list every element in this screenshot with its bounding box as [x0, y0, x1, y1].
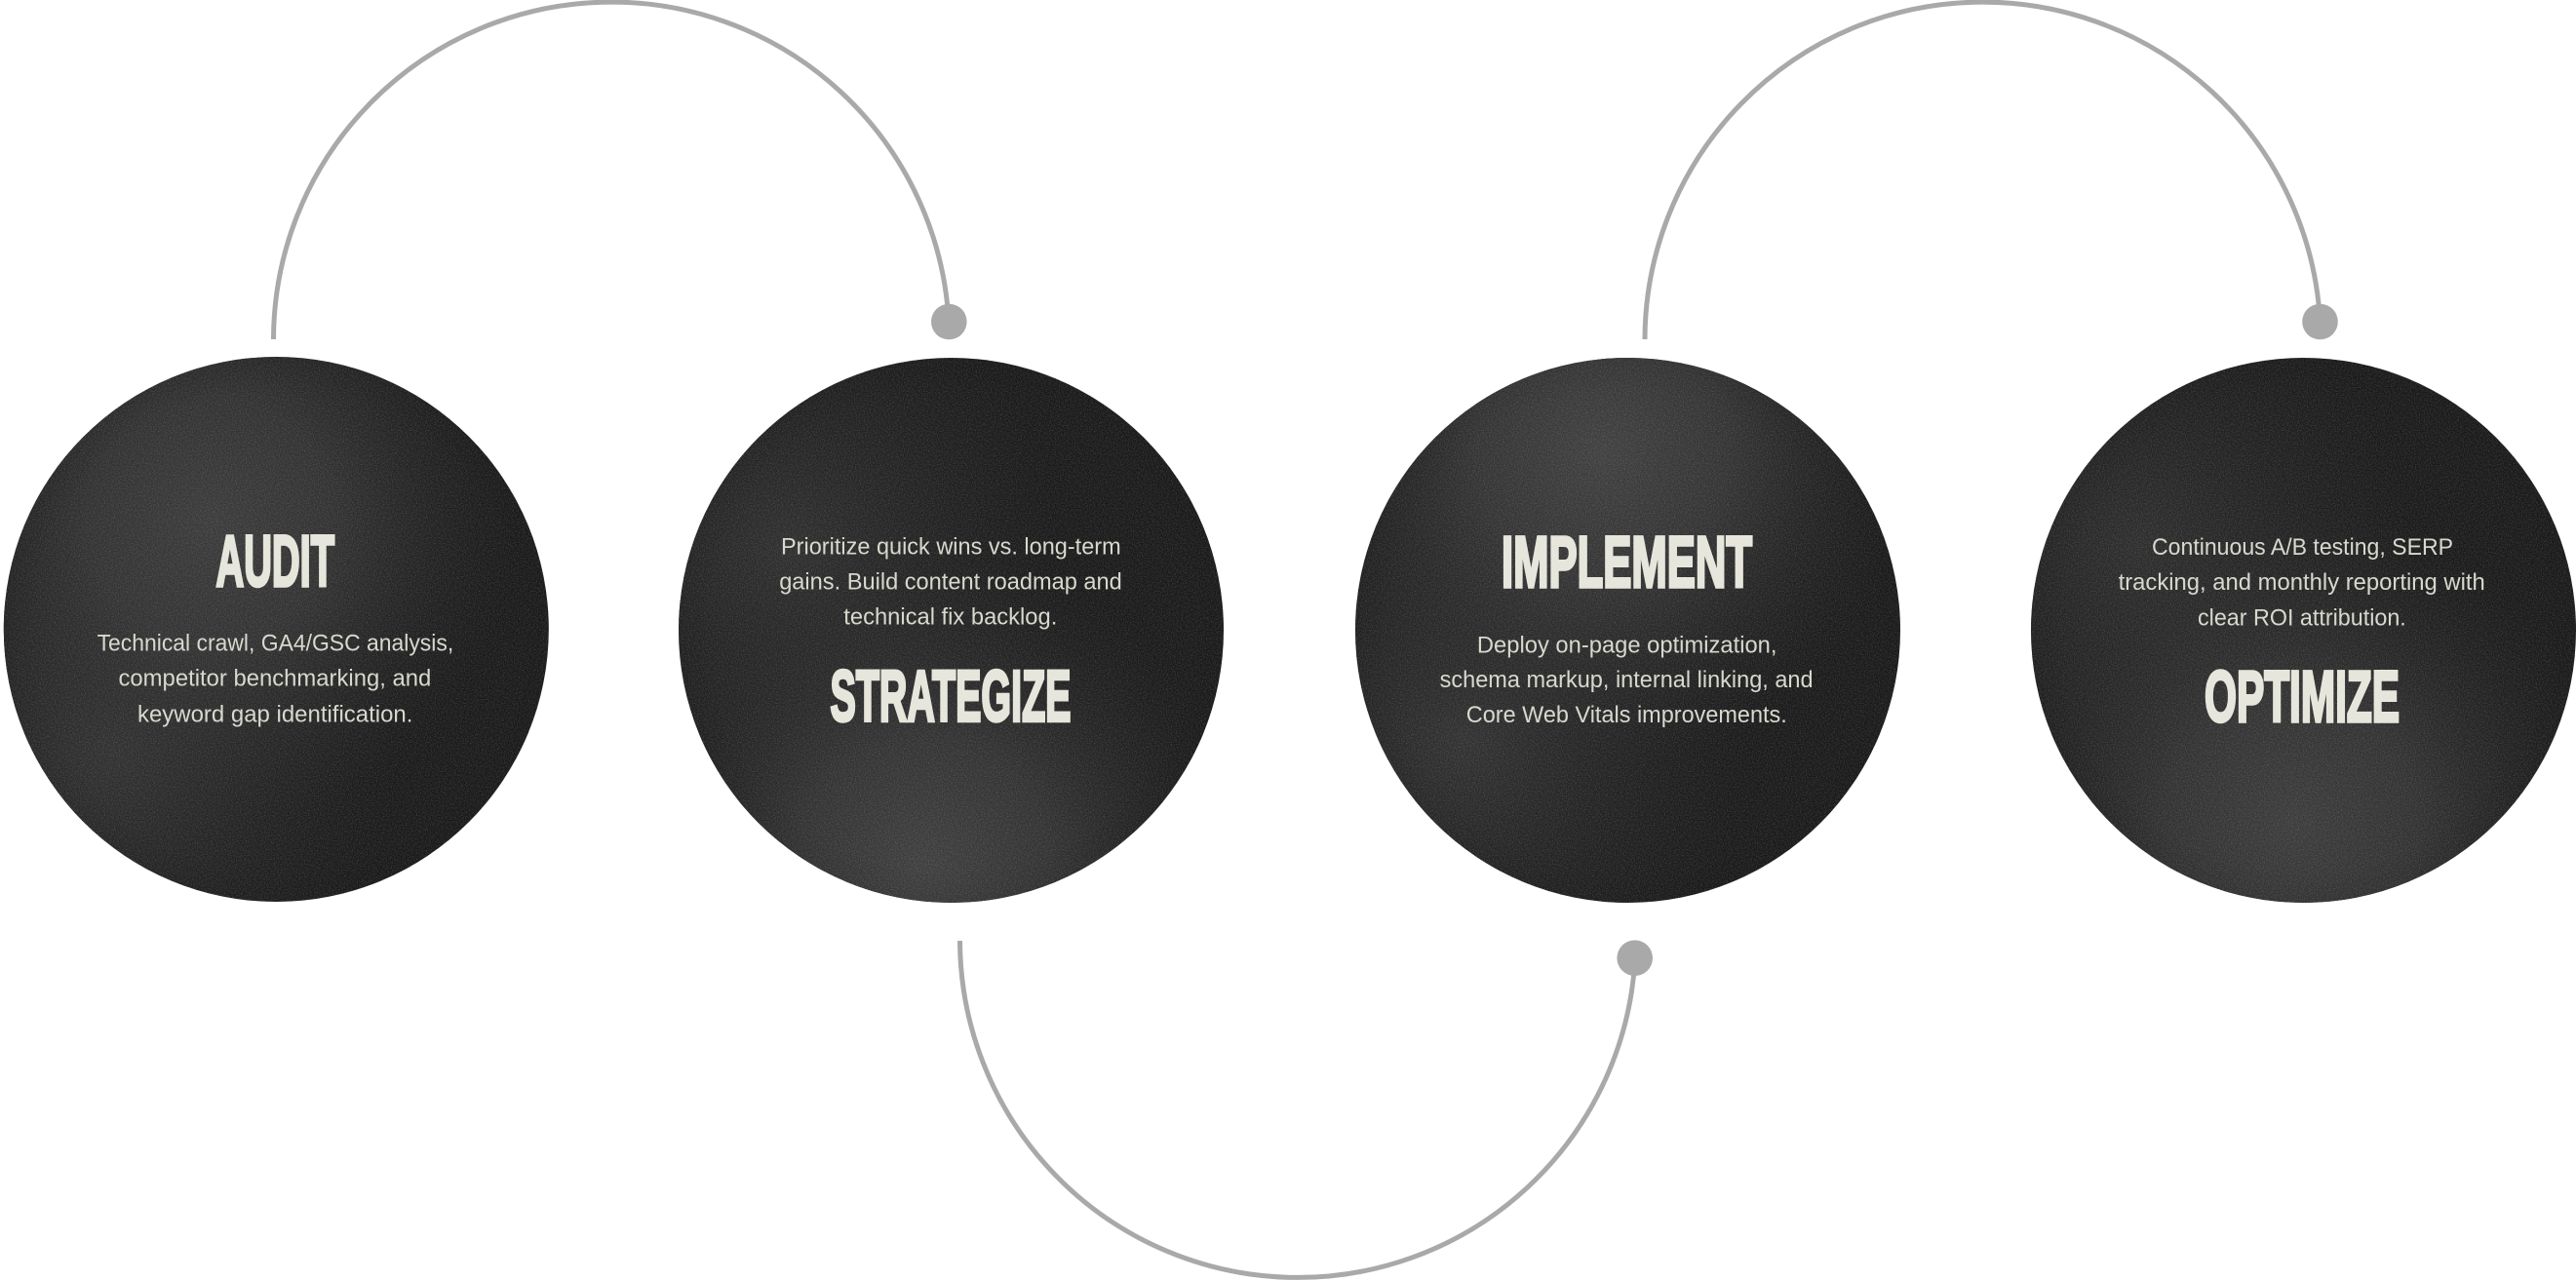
- optimize description: [2119, 534, 2485, 632]
- connector arc: audit to strategize: [273, 2, 967, 339]
- heading: implement: IMPLEMENT: [1502, 522, 1752, 602]
- heading: optimize: OPTIMIZE: [2205, 656, 2400, 737]
- implement circle background: [1355, 358, 1900, 903]
- panel: implement: [1355, 358, 1900, 903]
- optimize description: Continuous A/B testing, SERP: [2152, 534, 2453, 561]
- implement description: [1440, 632, 1814, 728]
- connector endpoint dot: implement: [1617, 940, 1653, 976]
- optimize circle background: [2031, 358, 2576, 903]
- strategize description: Prioritize quick wins vs. long-term: [781, 534, 1121, 560]
- panel: strategize: [679, 358, 1224, 903]
- audit circle background: [4, 357, 549, 902]
- panel: optimize: [2031, 358, 2576, 903]
- panel: audit: [4, 357, 549, 902]
- strategize description: gains. Build content roadmap and: [779, 568, 1122, 595]
- heading: audit: AUDIT: [216, 521, 334, 602]
- implement description: Core Web Vitals improvements.: [1466, 702, 1787, 728]
- connector endpoint dot: optimize: [2302, 304, 2338, 339]
- optimize description: clear ROI attribution.: [2198, 604, 2406, 632]
- strategize circle background: [679, 358, 1224, 903]
- connector arc: implement to optimize: [1645, 2, 2338, 339]
- implement description: schema markup, internal linking, and: [1440, 667, 1814, 693]
- heading: strategize: STRATEGIZE: [831, 655, 1071, 737]
- connector arc: strategize to implement: [959, 940, 1653, 1277]
- audit description: keyword gap identification.: [137, 702, 412, 727]
- audit description: Technical crawl, GA4/GSC analysis,: [98, 631, 453, 657]
- audit description: competitor benchmarking, and: [119, 666, 431, 692]
- strategize description: [779, 534, 1122, 631]
- strategize description: technical fix backlog.: [843, 604, 1057, 631]
- implement description: Deploy on-page optimization,: [1477, 632, 1776, 659]
- audit description: [98, 631, 453, 727]
- optimize description: tracking, and monthly reporting with: [2119, 569, 2485, 596]
- connector endpoint dot: strategize: [931, 304, 967, 339]
